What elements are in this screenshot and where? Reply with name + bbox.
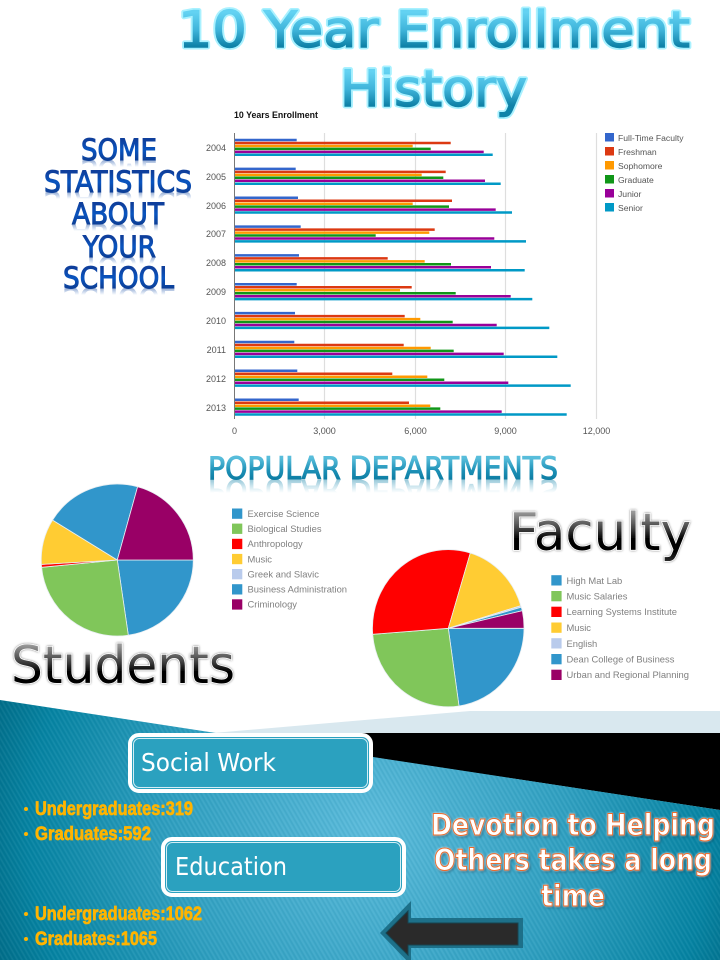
box: education: Education: [175, 852, 287, 881]
bar chart: 10 years enrollment: [206, 110, 684, 436]
box: education: [163, 839, 404, 895]
bars: [235, 140, 571, 414]
legend: faculty: Urban and Regional Planning: [566, 669, 689, 680]
heading: some statistics about your school: SCHOOL: [63, 261, 174, 295]
year labels: 2011: [207, 345, 226, 355]
stats: social work: Graduates:592: [35, 823, 151, 845]
value axis labels: [232, 426, 610, 436]
legend: students: Greek and Slavic: [248, 568, 319, 580]
stats: social work: [24, 798, 193, 845]
stats: education: Graduates:1065: [35, 928, 157, 950]
stats: education: Undergraduates:1062: [35, 903, 202, 925]
heading: some statistics about your school: YOUR: [82, 230, 156, 264]
chart legend: Graduate: [618, 175, 654, 185]
legend: faculty: Dean College of Business: [566, 654, 675, 664]
legend: faculty: Music Salaries: [566, 590, 628, 602]
legend: students: Music: [248, 554, 272, 564]
chart legend: Full-Time Faculty: [618, 133, 684, 143]
legend: students: Biological Studies: [248, 523, 322, 534]
label: students: Students: [11, 636, 235, 696]
legend: faculty: High Mat Lab: [566, 575, 622, 586]
year labels: 2010: [206, 316, 226, 326]
year labels: 2007: [206, 229, 226, 239]
box: social work: Social Work: [141, 748, 276, 777]
callout: devotion to helping others: [431, 808, 715, 913]
heading: some statistics about your school: ABOUT: [72, 197, 164, 231]
value axis labels: 6,000: [404, 426, 427, 436]
legend: students: Exercise Science: [248, 508, 319, 519]
legend: students: [232, 508, 347, 610]
pie chart: students: [41, 484, 193, 636]
pie chart: faculty: [372, 550, 524, 707]
chart gridlines and axis: [234, 133, 596, 419]
heading: some statistics about your school: SOME: [81, 133, 157, 167]
chart legend: [605, 133, 684, 213]
legend: students: Business Administration: [248, 584, 347, 594]
chart legend: Junior: [618, 189, 642, 199]
legend: faculty: Music: [566, 622, 591, 633]
chart legend: Sophomore: [618, 161, 663, 171]
value axis labels: 3,000: [313, 426, 336, 436]
title: 10 Year Enrollment: [178, 1, 690, 59]
stats: social work: Undergraduates:319: [35, 798, 193, 820]
heading: popular departments: POPULAR DEPARTMENTS: [208, 451, 558, 487]
chart title: 10 Years Enrollment: [234, 110, 318, 120]
value axis labels: 9,000: [494, 426, 517, 436]
year labels: 2008: [206, 258, 226, 268]
heading: some statistics about your school: STATISTICS: [44, 165, 192, 199]
chart legend: Senior: [618, 203, 643, 213]
year labels: 2005: [206, 172, 226, 182]
year labels: 2004: [206, 143, 226, 153]
heading: some statistics about your school: [45, 138, 191, 294]
legend: faculty: English: [566, 638, 597, 649]
box: social work: [130, 735, 371, 791]
year labels: 2013: [206, 403, 226, 413]
background: black block: [213, 733, 720, 810]
year labels: 2009: [206, 287, 226, 297]
year labels: [206, 143, 226, 413]
title: History: [340, 60, 527, 118]
label: faculty: Faculty: [509, 503, 691, 563]
callout: devotion to helping others: time: [541, 879, 605, 913]
arrow: pointing left: [380, 901, 523, 960]
stats: education: [24, 903, 202, 950]
legend: students: Anthropology: [248, 538, 303, 549]
legend: students: Criminology: [248, 598, 297, 610]
title: [178, 1, 690, 118]
year labels: 2006: [206, 201, 226, 211]
chart legend: Freshman: [618, 147, 657, 157]
background: teal panel: [0, 700, 720, 960]
legend: faculty: [551, 575, 689, 680]
background: pale band: [213, 711, 720, 733]
value axis labels: 12,000: [583, 426, 610, 436]
value axis labels: 0: [232, 426, 237, 436]
year labels: 2012: [206, 374, 226, 384]
legend: faculty: Learning Systems Institute: [566, 606, 677, 617]
